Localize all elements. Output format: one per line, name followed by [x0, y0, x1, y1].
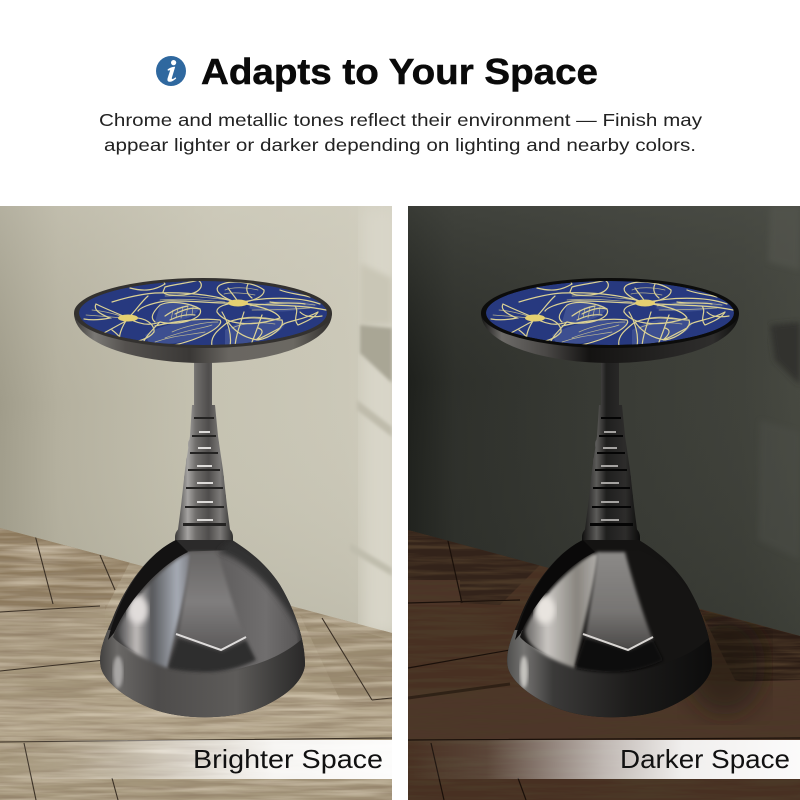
- wall: dark room: [408, 206, 800, 646]
- description text: Chrome and metallic tones reflect their environment — Finish may: [99, 110, 702, 130]
- bell base: [100, 540, 305, 718]
- icon: info badge: [156, 56, 186, 86]
- label: darker space: Darker Space: [620, 744, 790, 774]
- floor: light wood: [0, 528, 392, 800]
- table: bright room: [74, 278, 332, 730]
- description text: [99, 110, 702, 155]
- heading: Adapts to Your Space: [201, 51, 598, 92]
- label: brighter space: Brighter Space: [193, 744, 383, 774]
- bell base: [507, 540, 712, 718]
- label: darker space: [408, 740, 800, 779]
- floor: dark wood: [408, 530, 800, 800]
- panel: brighter space: [0, 206, 402, 800]
- table rim and top: [74, 278, 332, 363]
- description text: appear lighter or darker depending on lighting and nearby colors.: [104, 135, 696, 155]
- table pedestal: [175, 360, 233, 553]
- table: dark room: [481, 278, 739, 730]
- wall: bright room: [0, 206, 402, 646]
- label: brighter space: [0, 740, 392, 779]
- table rim and top: [481, 278, 739, 363]
- table pedestal: [582, 360, 640, 553]
- panel: darker space: [408, 206, 800, 800]
- title row: [156, 51, 598, 92]
